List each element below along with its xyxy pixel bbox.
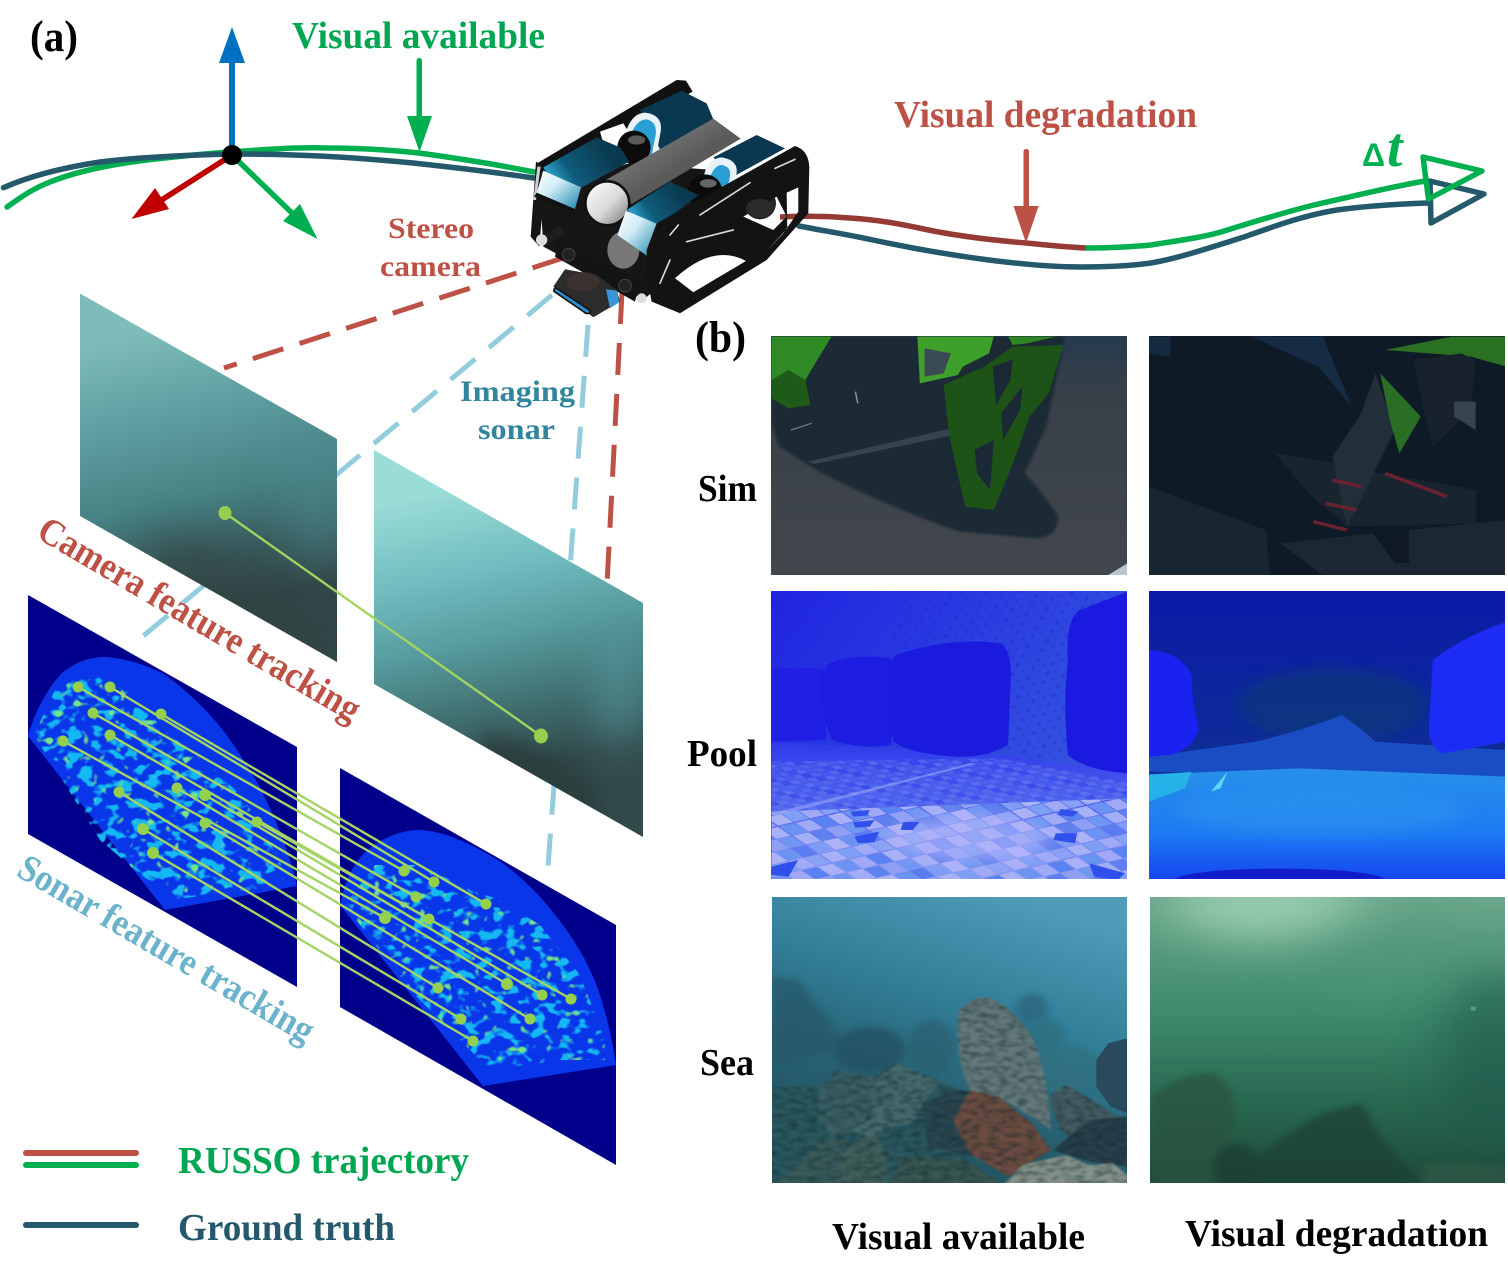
lower body interior bbox=[540, 163, 733, 300]
imaging sonar body bbox=[553, 269, 620, 317]
label: visual degradation: Visual degradation bbox=[894, 94, 1197, 136]
icon: underwater robot bbox=[531, 80, 809, 317]
right frame plate bbox=[647, 146, 809, 313]
label: imaging sonar: Imaging bbox=[460, 375, 575, 408]
sonar image right bbox=[340, 768, 616, 1165]
bright floor sheet bbox=[1149, 768, 1507, 880]
legend label: ground truth: Ground truth bbox=[178, 1207, 395, 1249]
panel label: (a): (a) bbox=[30, 12, 78, 61]
sonar feature matches bbox=[58, 682, 576, 1046]
row label: Pool: Pool bbox=[687, 733, 757, 775]
rear pod bbox=[640, 91, 713, 149]
origin dot bbox=[222, 145, 242, 165]
stereo camera link to right image bbox=[607, 292, 622, 585]
sonar link to right sonar image bbox=[547, 325, 588, 880]
ground truth and estimated trajectory bbox=[3, 148, 1484, 267]
row label: Sim: Sim bbox=[698, 468, 757, 510]
thruster inside opening bbox=[746, 199, 774, 218]
arrow: visual degradation bbox=[1014, 149, 1039, 243]
sonar echoes right bbox=[345, 865, 605, 1070]
label: stereo camera: camera bbox=[380, 250, 481, 283]
cushions bbox=[771, 668, 827, 742]
coordinate axes bbox=[132, 27, 318, 239]
green trajectory left segment bbox=[7, 148, 534, 207]
legend line: RUSSO red bbox=[26, 1150, 136, 1156]
sonar image left bbox=[28, 595, 297, 987]
right rear pod bbox=[713, 135, 785, 177]
left lens barrel bbox=[543, 225, 565, 245]
photo: sea visual degradation bbox=[1150, 897, 1505, 1183]
label: camera feature tracking: Camera feature tracking bbox=[30, 509, 368, 730]
sonar fan right bbox=[340, 830, 616, 1086]
front left pod face bbox=[537, 171, 581, 209]
label: delta t: Δt bbox=[1362, 117, 1404, 179]
floor seam bbox=[771, 763, 977, 817]
front left pod top bbox=[543, 137, 629, 188]
column label: visual available: Visual available bbox=[832, 1216, 1085, 1258]
photo: simulation visual available bbox=[771, 336, 1127, 575]
frame slots bbox=[660, 159, 795, 283]
arrow: visual available bbox=[407, 58, 432, 152]
label: visual available: Visual available bbox=[292, 15, 545, 57]
panel label: (b): (b) bbox=[695, 313, 746, 362]
sonar blue strip bbox=[606, 289, 619, 308]
right thruster duct bbox=[704, 157, 737, 193]
photo: sea visual available bbox=[772, 897, 1127, 1185]
sonar aperture bbox=[554, 288, 590, 313]
hull end cap bbox=[585, 181, 629, 225]
legend bbox=[26, 1140, 469, 1249]
sonar echoes left bbox=[34, 672, 285, 900]
front right pod face bbox=[617, 211, 657, 257]
match points bbox=[58, 682, 576, 1046]
cushions bbox=[1149, 650, 1199, 757]
ground truth left segment bbox=[3, 154, 534, 188]
photo: pool visual available bbox=[771, 591, 1127, 880]
sonar fan left bbox=[28, 657, 297, 910]
green trajectory right segment bbox=[1086, 181, 1425, 248]
sediment mound bbox=[1149, 715, 1507, 777]
y axis arrow bbox=[232, 155, 318, 239]
rear thruster bbox=[617, 131, 651, 164]
photo: pool visual degradation bbox=[1149, 591, 1507, 891]
label: sonar feature tracking: Sonar feature tracking bbox=[10, 846, 322, 1052]
camera image left bbox=[80, 294, 337, 662]
label: imaging sonar bbox=[460, 375, 575, 446]
label: imaging sonar: sonar bbox=[478, 413, 555, 446]
column label: visual degradation: Visual degradation bbox=[1185, 1213, 1488, 1255]
stereo camera link to left image bbox=[224, 258, 563, 368]
camera image right bbox=[374, 450, 645, 840]
dark mosaic tiles bbox=[771, 809, 1125, 880]
x axis arrow bbox=[132, 155, 232, 219]
left frame side bbox=[531, 162, 543, 247]
degraded trajectory segment bbox=[780, 216, 1086, 248]
z axis arrow bbox=[219, 27, 245, 155]
label: stereo camera bbox=[380, 212, 481, 283]
row label: Sea: Sea bbox=[700, 1042, 754, 1084]
match lines bbox=[63, 687, 571, 1041]
legend line: ground truth bbox=[26, 1222, 136, 1228]
label: stereo camera: Stereo bbox=[388, 212, 474, 245]
pressure hull bbox=[600, 119, 741, 204]
photo: simulation visual degradation bbox=[1149, 336, 1507, 575]
right thruster bbox=[688, 174, 722, 209]
legend line: RUSSO green bbox=[26, 1162, 136, 1168]
rear thruster duct bbox=[626, 113, 661, 160]
dashed links from sensors to image planes bbox=[130, 258, 622, 880]
far thruster behind plate bbox=[744, 187, 776, 219]
camera housing bar bbox=[555, 238, 640, 302]
legend label: RUSSO trajectory: RUSSO trajectory bbox=[178, 1140, 469, 1182]
back frame rail bbox=[536, 80, 693, 175]
ground truth end pose triangle bbox=[1430, 181, 1484, 223]
sonar link to left sonar image bbox=[130, 295, 552, 647]
camera feature match bbox=[218, 506, 548, 744]
camera lenses bbox=[562, 248, 575, 261]
ground truth right segment bbox=[799, 203, 1428, 267]
lower hull disc bbox=[607, 231, 639, 269]
front right pod top bbox=[627, 182, 698, 225]
estimated end pose triangle bbox=[1423, 157, 1482, 199]
